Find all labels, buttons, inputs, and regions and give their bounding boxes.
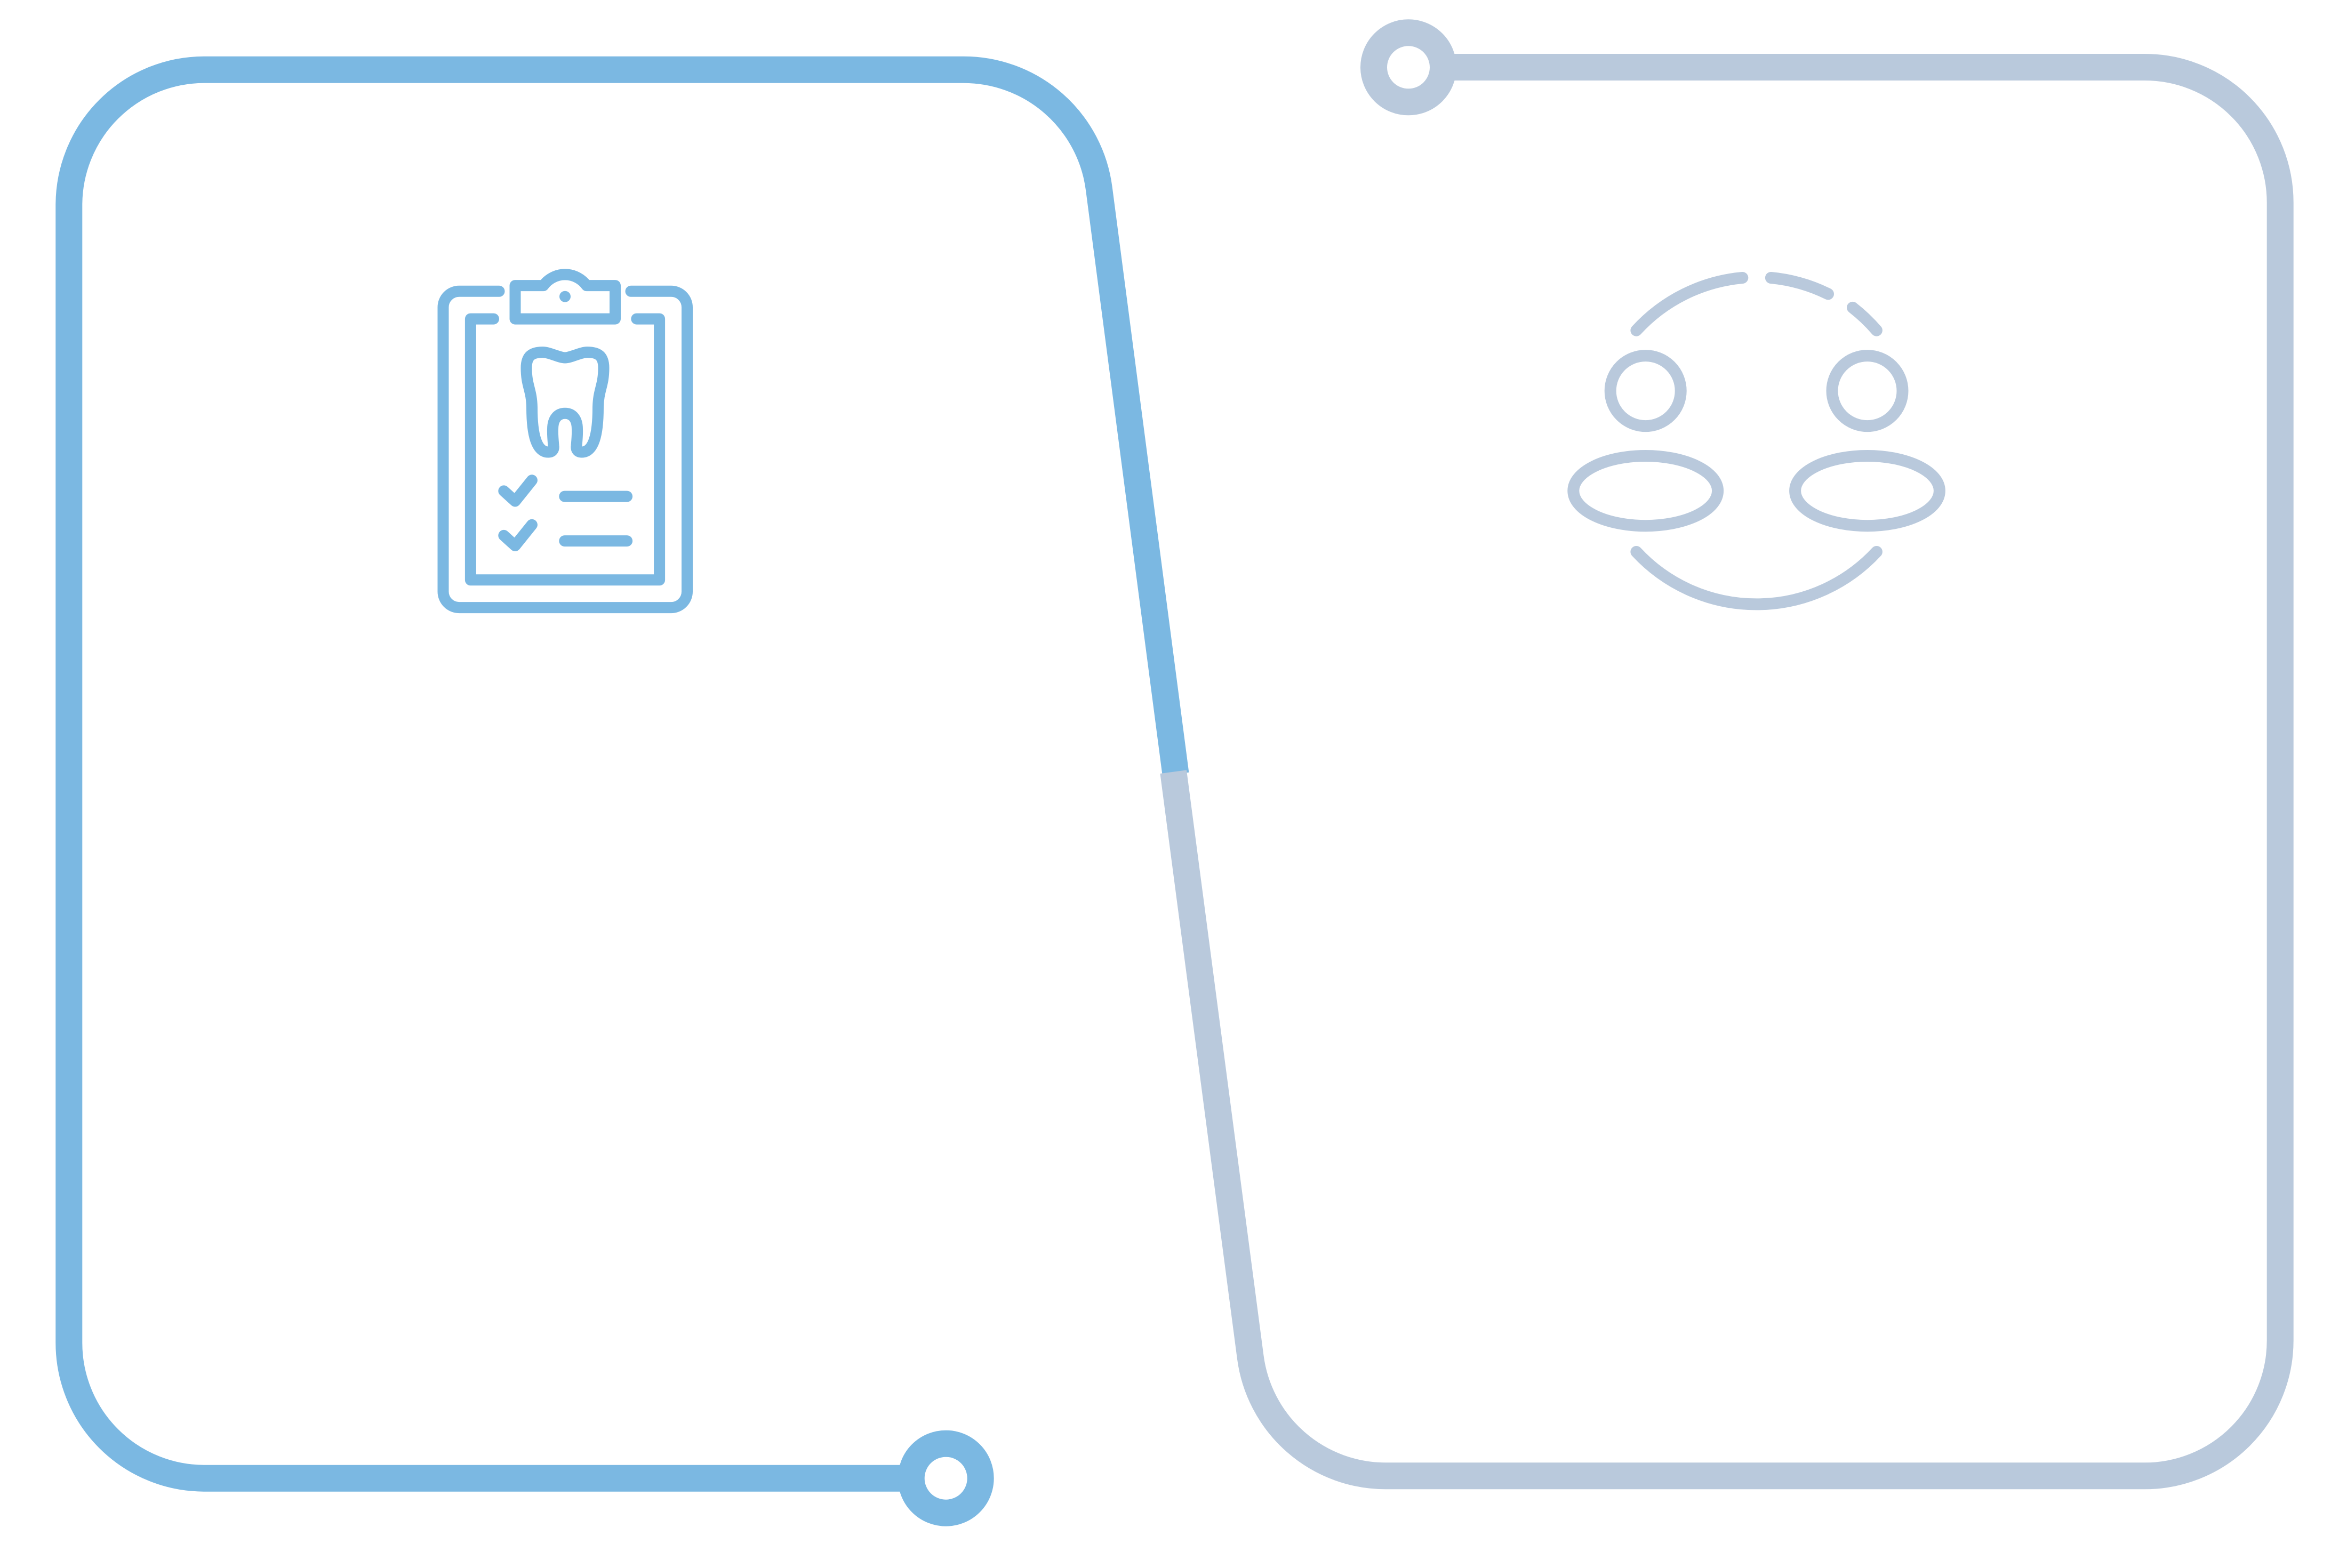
tooth [526, 352, 604, 452]
panel: slate connector outline with end node [1173, 33, 2280, 1476]
clip hole [559, 291, 571, 302]
top arc middle [1771, 278, 1828, 294]
top arc right [1853, 308, 1877, 331]
left person head [1611, 356, 1681, 426]
bottom arc [1636, 552, 1877, 604]
list line one [565, 491, 627, 502]
blue end node [911, 1444, 981, 1513]
slate panel outline [1173, 67, 2280, 1476]
left person body [1573, 456, 1718, 526]
panel: blue connector outline with end node [69, 70, 1176, 1513]
slate end node [1374, 33, 1443, 102]
list line two [565, 535, 627, 546]
clipboard clip [515, 275, 615, 319]
top arc left [1636, 278, 1742, 331]
check mark two [504, 525, 532, 546]
blue panel outline [69, 70, 1176, 1478]
right person body [1795, 456, 1940, 526]
clipboard board [443, 291, 687, 608]
icon: two people in a circle [1573, 278, 1940, 604]
check mark one [504, 480, 532, 501]
clipboard paper [470, 319, 660, 580]
icon: dental clipboard [443, 275, 687, 608]
right person head [1832, 356, 1903, 426]
